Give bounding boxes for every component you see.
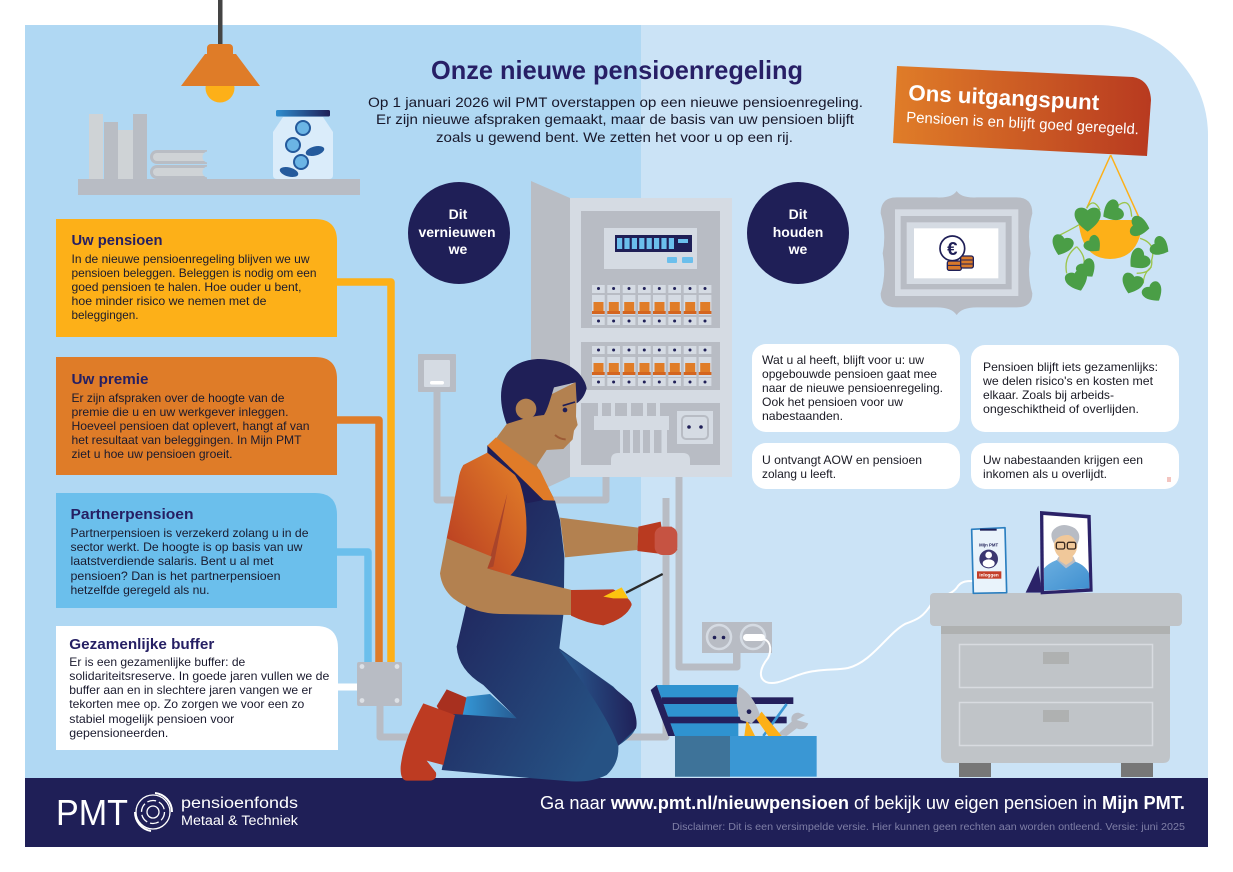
panel: gezamenlijke buffer: buffer aan en in slechtere jaren vangen we er — [69, 684, 312, 697]
card: pensioen blijft gezamenlijk: Pensioen blijft iets gezamenlijks: — [983, 360, 1158, 374]
smartphone — [972, 528, 1007, 593]
card: pensioen blijft gezamenlijk: elkaar. Zoals bij arbeids- — [983, 388, 1114, 402]
badge: dit houden we: Dit — [789, 206, 808, 222]
panel: gezamenlijke buffer — [56, 626, 338, 750]
card: aow en pensioen — [752, 443, 960, 489]
footer call to action: Ga naar www.pmt.nl/nieuwpensioen of bekijk uw eigen pensioen in Mijn PMT. — [540, 792, 1185, 813]
card: wat u al heeft: Ook het pensioen voor uw — [762, 395, 903, 409]
icon: euro and coins: € — [947, 238, 958, 259]
panel: partnerpensioen: sector werkt. De hoogte is op basis van uw — [70, 541, 303, 554]
panel: gezamenlijke buffer: Gezamenlijke buffer — [69, 637, 215, 653]
pliers — [737, 687, 782, 736]
banner: ons uitgangspunt: Pensioen is en blijft goed geregeld. — [906, 109, 1139, 138]
panel: uw premie — [56, 357, 337, 475]
icon: hanging lamp — [181, 0, 260, 102]
panel: uw premie: ziet u hoe uw pensioen groeit. — [72, 448, 232, 461]
panel: uw pensioen — [56, 219, 337, 337]
intro text: Op 1 januari 2026 wil PMT overstappen op een nieuwe pensioenregeling. — [368, 94, 863, 110]
intro text: zoals u gewend bent. We zetten het voor u op een rij. — [436, 129, 793, 145]
breaker row 1 — [592, 285, 711, 325]
ear — [516, 399, 536, 419]
logo: PMT wordmark: PMT — [56, 792, 128, 833]
hanging plant — [1048, 155, 1173, 307]
badge: dit houden we: houden — [773, 224, 823, 240]
badge: dit vernieuwen we: we — [448, 241, 468, 257]
panel: gezamenlijke buffer: Er is een gezamenlijke buffer: de — [69, 656, 245, 669]
card: wat u al heeft: opgebouwde pensioen gaat mee — [762, 367, 937, 381]
panel: gezamenlijke buffer: gepensioneerden. — [69, 727, 168, 740]
panel: gezamenlijke buffer: stabiel mogelijk pensioen voor — [69, 713, 234, 726]
intro text: Er zijn nieuwe afspraken gemaakt, maar de basis van uw pensioen blijft — [376, 111, 854, 127]
wrench — [777, 713, 808, 736]
badge: dit houden we: we — [788, 241, 808, 257]
sleeve — [447, 453, 527, 576]
illustration: kneeling technician — [401, 359, 677, 782]
bedside cabinet — [930, 593, 1182, 777]
badge: dit vernieuwen we — [408, 182, 510, 284]
screwdriver — [603, 574, 663, 598]
card: nabestaanden — [971, 443, 1179, 489]
wires from panels to junction box — [336, 282, 737, 737]
footer bar — [25, 778, 1208, 847]
card: nabestaanden: inkomen als u overlijdt. — [983, 467, 1107, 481]
neck and face — [490, 382, 578, 498]
panel: uw pensioen: pensioen beleggen. Beleggen is nodig om een — [72, 267, 316, 280]
badge: dit vernieuwen we: Dit — [449, 206, 468, 222]
panel: partnerpensioen: laatstverdiende salaris. Bent u al met — [70, 555, 274, 568]
icon: toolbox — [651, 685, 817, 777]
card: wat u al heeft: nabestaanden. — [762, 409, 843, 423]
trousers and apron — [442, 445, 637, 782]
card: wat u al heeft — [752, 344, 960, 432]
panel: partnerpensioen: Partnerpensioen — [70, 507, 194, 523]
panel: uw pensioen: goed pensioen te halen. Hoe ouder u bent, — [72, 281, 302, 294]
title: Onze nieuwe pensioenregeling — [431, 55, 803, 85]
front boot — [401, 703, 455, 781]
card: pensioen blijft gezamenlijk — [971, 345, 1179, 432]
panel: uw premie: Hoeveel pensioen dat oplevert, hangt af van — [72, 420, 310, 433]
breaker row 2 — [592, 346, 711, 386]
back calf and boot — [437, 689, 518, 719]
panel: partnerpensioen — [56, 493, 337, 608]
card: aow en pensioen: zolang u leeft. — [762, 467, 836, 481]
panel: uw pensioen: beleggingen. — [72, 309, 138, 322]
logo: metaal en techniek text: Metaal & Techniek — [181, 813, 298, 828]
badge: dit vernieuwen we: vernieuwen — [418, 224, 496, 240]
icon: jar with coins — [273, 110, 333, 179]
card: pensioen blijft gezamenlijk: we delen risico's en kosten met — [982, 374, 1154, 388]
card: wat u al heeft: naar de nieuwe pensioenregeling. — [762, 381, 943, 395]
smartphone: Inloggen — [979, 573, 999, 578]
card: aow en pensioen: U ontvangt AOW en pensioen — [762, 453, 922, 467]
logo: pensioenfonds text: pensioenfonds — [181, 795, 298, 812]
banner: ons uitgangspunt: Ons uitgangspunt — [908, 80, 1100, 115]
panel: uw premie: het resultaat van beleggingen. In Mijn PMT — [72, 434, 302, 447]
intro text — [368, 94, 863, 145]
framed portrait — [1026, 511, 1093, 594]
panel: uw pensioen: Uw pensioen — [72, 233, 162, 249]
smartphone: Mijn PMT — [979, 543, 999, 548]
badge: dit houden we — [747, 182, 849, 284]
panel: uw premie: Uw premie — [72, 372, 148, 388]
wall socket — [702, 622, 772, 664]
icon: PMT logo mark — [135, 793, 172, 831]
banner: ons uitgangspunt — [893, 66, 1151, 156]
charging cable — [761, 581, 973, 683]
panel: uw premie: Er zijn afspraken over de hoogte van de — [72, 392, 284, 405]
panel: uw pensioen: In de nieuwe pensioenregeling blijven we uw — [72, 253, 310, 266]
junction box — [357, 662, 402, 706]
arms — [440, 518, 638, 615]
electrical cabinet — [531, 181, 732, 495]
collar — [487, 437, 555, 501]
hair — [501, 359, 587, 424]
panel: gezamenlijke buffer: tekorten mee op. Zo zorgen we voor een zo — [69, 698, 304, 711]
panel: partnerpensioen: pensioen? Dan is het partnerpensioen — [70, 570, 280, 583]
card: pensioen blijft gezamenlijk: ongeschiktheid of overlijden. — [983, 402, 1139, 416]
gloves — [571, 522, 677, 625]
card: nabestaanden: Uw nabestaanden krijgen een — [983, 453, 1143, 467]
panel: uw pensioen: hoe minder risico we nemen met de — [72, 295, 266, 308]
icon: euro and coins — [940, 236, 973, 270]
panel: gezamenlijke buffer: solidariteitsreserve. In goede jaren vullen we de — [69, 670, 329, 683]
wall switch — [418, 354, 456, 392]
framed picture — [881, 191, 1032, 315]
panel: partnerpensioen: Partnerpensioen is verzekerd zolang u in de — [70, 527, 308, 540]
panel: uw premie: premie die u en uw werkgever inleggen. — [72, 406, 288, 419]
disclaimer: Disclaimer: Dit is een versimpelde versie. Hier kunnen geen rechten aan worden ontleend. Versie: juni 2025 — [672, 822, 1185, 833]
shelf with books — [78, 114, 360, 195]
eye and mouth — [555, 402, 575, 439]
panel: partnerpensioen: hetzelfde geregeld als nu. — [70, 584, 210, 597]
card: wat u al heeft: Wat u al heeft, blijft voor u: uw — [762, 353, 924, 367]
